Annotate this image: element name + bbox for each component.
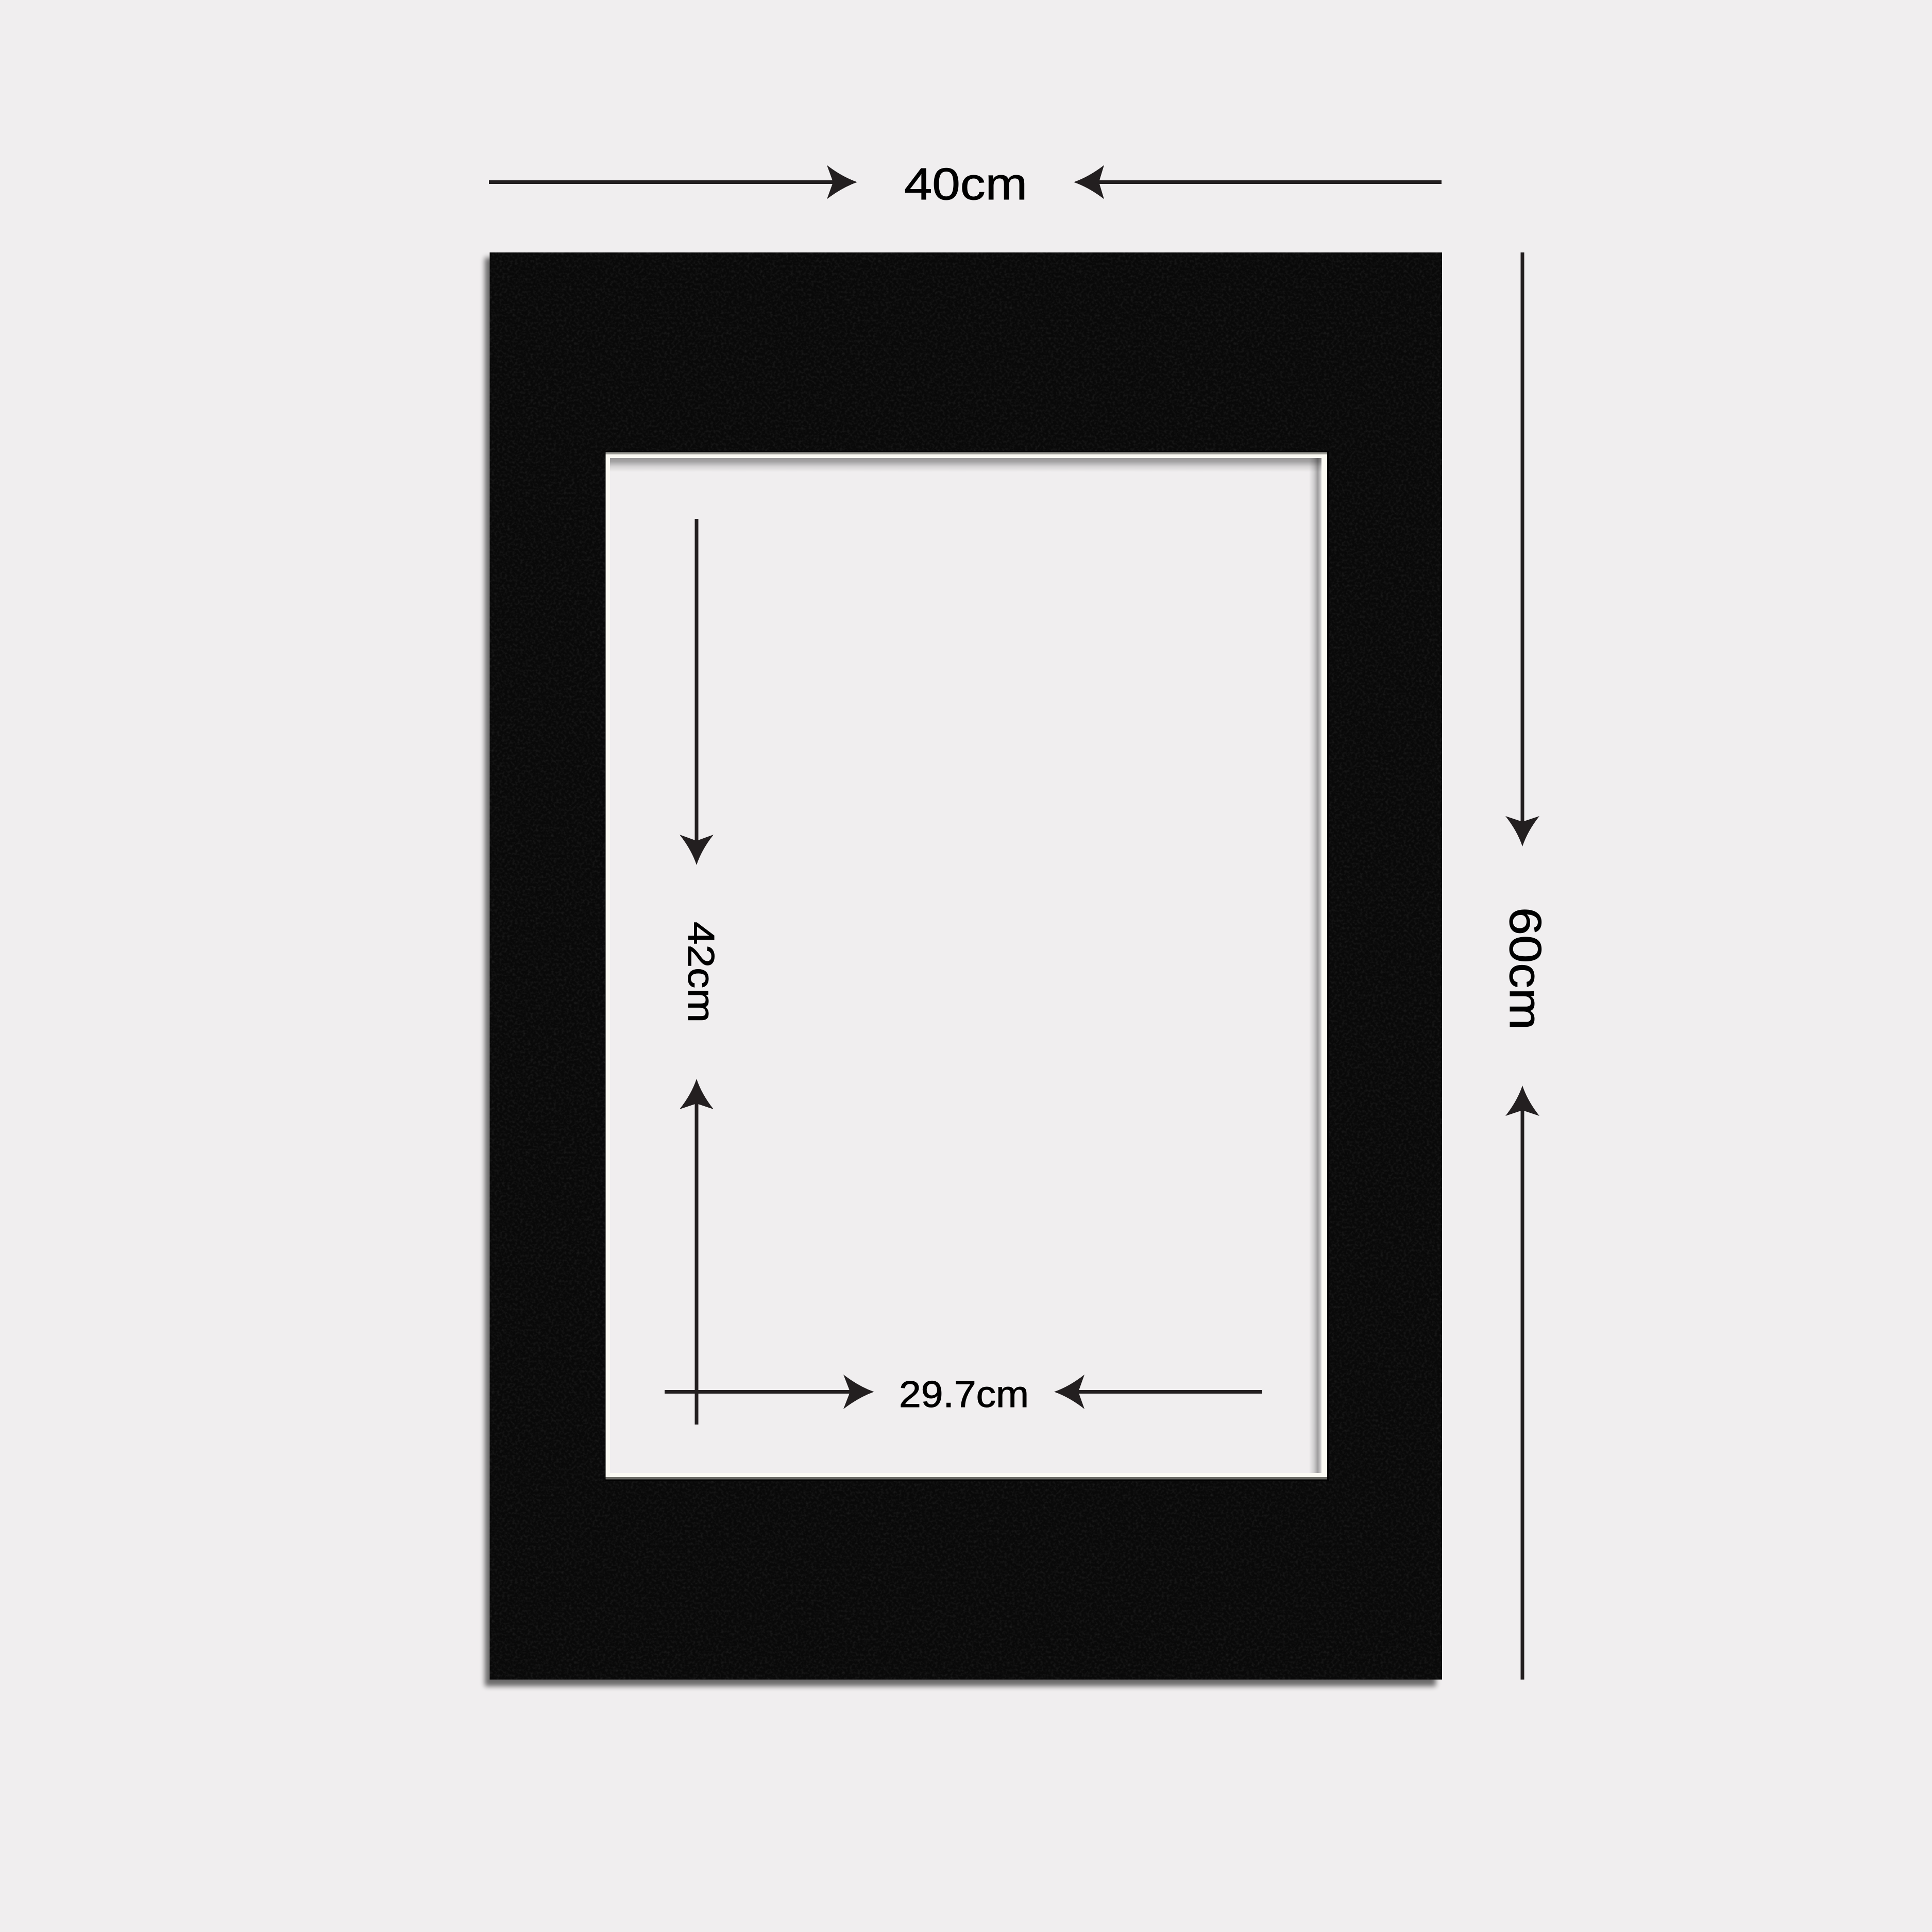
- board paper grain: [489, 252, 1442, 1680]
- window inner shadow top: [610, 458, 1321, 472]
- arrow: 60cm top: [1505, 252, 1539, 846]
- board drop shadow: [485, 258, 1436, 1686]
- panel: black mount board with window opening: [485, 252, 1442, 1686]
- arrow: 29.7cm right: [1054, 1375, 1262, 1409]
- arrow: 42cm top: [680, 519, 714, 865]
- window bevel top strip: [606, 452, 1327, 455]
- board surface: [489, 252, 1442, 1680]
- arrow: 40cm right: [1074, 165, 1442, 199]
- arrow: 40cm left: [489, 165, 857, 199]
- label: 60cm: 60cm: [1500, 907, 1550, 1030]
- label: 40cm: 40cm: [904, 159, 1027, 209]
- arrow: 42cm bottom: [680, 1079, 714, 1425]
- arrow: 29.7cm left: [665, 1375, 874, 1409]
- window bevel bottom strip: [606, 1477, 1327, 1480]
- arrow: 60cm bottom: [1505, 1086, 1539, 1680]
- window opening: [610, 458, 1321, 1473]
- window cream bevel: [606, 454, 1327, 1477]
- label: 42cm: 42cm: [680, 922, 721, 1023]
- label: 29.7cm: 29.7cm: [899, 1374, 1029, 1415]
- window inner shadow right: [1309, 458, 1321, 1473]
- window dark cut edge: [605, 451, 1329, 1481]
